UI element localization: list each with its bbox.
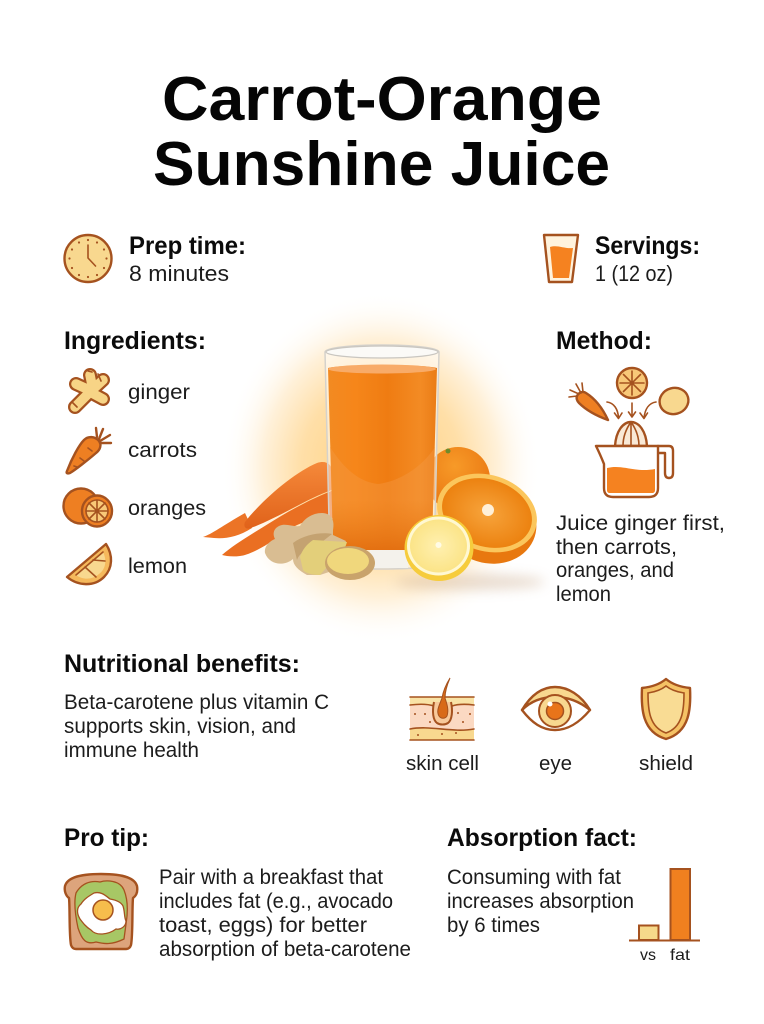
- jug juice: [607, 467, 655, 493]
- benefits text: [64, 691, 329, 762]
- icon: shield: [642, 679, 690, 739]
- bar chart: vs: [640, 947, 656, 964]
- label: skin cell: skin cell: [406, 753, 479, 775]
- panel: nutritional benefits: [64, 650, 693, 775]
- servings text: Servings:: [595, 232, 700, 260]
- label: ginger: ginger: [128, 381, 190, 404]
- benefits text: immune health: [64, 739, 199, 762]
- panel: absorption fact: [447, 824, 700, 964]
- title: Carrot-Orange: [162, 65, 602, 134]
- prep time block: [64, 232, 246, 286]
- label: lemon: lemon: [128, 555, 187, 578]
- panel: pro tip: [64, 824, 411, 961]
- pro tip text: toast, eggs) for better: [159, 914, 367, 937]
- panel: ingredients: [64, 327, 206, 584]
- servings text: [595, 232, 700, 286]
- jug handle: [658, 446, 673, 478]
- panel: method: [556, 327, 725, 606]
- heading: pro tip: Pro tip:: [64, 824, 149, 852]
- label: carrots: carrots: [128, 439, 197, 462]
- servings text: 1 (12 oz): [595, 261, 673, 286]
- absorption text: [447, 866, 634, 937]
- bar chart: fat: [670, 947, 691, 964]
- prep time text: Prep time:: [129, 232, 246, 260]
- servings block: [544, 232, 700, 286]
- title: [153, 65, 610, 199]
- benefits text: supports skin, vision, and: [64, 715, 296, 738]
- label: shield: shield: [639, 753, 693, 775]
- title: Sunshine Juice: [153, 130, 610, 199]
- jug body: [596, 446, 658, 497]
- heading: ingredients: Ingredients:: [64, 327, 206, 355]
- background glow: [221, 292, 541, 644]
- ginger: [265, 513, 375, 580]
- half orange: [427, 461, 547, 576]
- bar chart: [629, 869, 700, 964]
- heading: method: Method:: [556, 327, 652, 355]
- orange slice: [617, 368, 647, 398]
- label: eye: eye: [539, 753, 572, 775]
- absorption text: Consuming with fat: [447, 866, 621, 889]
- glass: [325, 345, 439, 569]
- pro tip text: includes fat (e.g., avocado: [159, 890, 393, 913]
- icon: ginger: [72, 371, 103, 407]
- icon: fruit going into juicer: [569, 368, 691, 497]
- method text: lemon: [556, 583, 611, 606]
- icon: clock: [64, 235, 112, 282]
- hero illustration: juice glass with fruit: [203, 292, 547, 644]
- orange behind: [426, 447, 490, 511]
- icon: lemon wedge: [67, 544, 111, 584]
- icon: oranges: [64, 488, 112, 526]
- label: oranges: oranges: [128, 497, 206, 520]
- lemon: [657, 385, 691, 417]
- icon: avocado toast with egg: [65, 874, 137, 949]
- lemon half: [404, 515, 474, 581]
- absorption text: increases absorption: [447, 890, 634, 913]
- juice: [328, 364, 437, 550]
- prep time text: [129, 232, 246, 286]
- heading: absorption fact: Absorption fact:: [447, 824, 637, 852]
- pro tip text: absorption of beta-carotene: [159, 938, 411, 961]
- method text: Juice ginger first,: [556, 512, 725, 535]
- icon: carrot: [67, 428, 111, 473]
- prep time text: 8 minutes: [129, 261, 229, 286]
- ground shadow: [395, 574, 545, 590]
- method text: then carrots,: [556, 536, 677, 559]
- heading: nutritional benefits: Nutritional benefits:: [64, 650, 300, 678]
- carrots: [203, 462, 334, 556]
- pro tip text: [159, 866, 411, 961]
- absorption text: by 6 times: [447, 914, 540, 937]
- method text: oranges, and: [556, 559, 674, 582]
- method text: [556, 512, 725, 606]
- icon: skin cell: [410, 678, 474, 740]
- pro tip text: Pair with a breakfast that: [159, 866, 383, 889]
- icon: eye: [522, 687, 590, 730]
- reamer: [615, 422, 647, 446]
- icon: glass of juice: [544, 235, 578, 282]
- arrows: [607, 402, 656, 418]
- carrot: [577, 392, 608, 420]
- benefits text: Beta-carotene plus vitamin C: [64, 691, 329, 714]
